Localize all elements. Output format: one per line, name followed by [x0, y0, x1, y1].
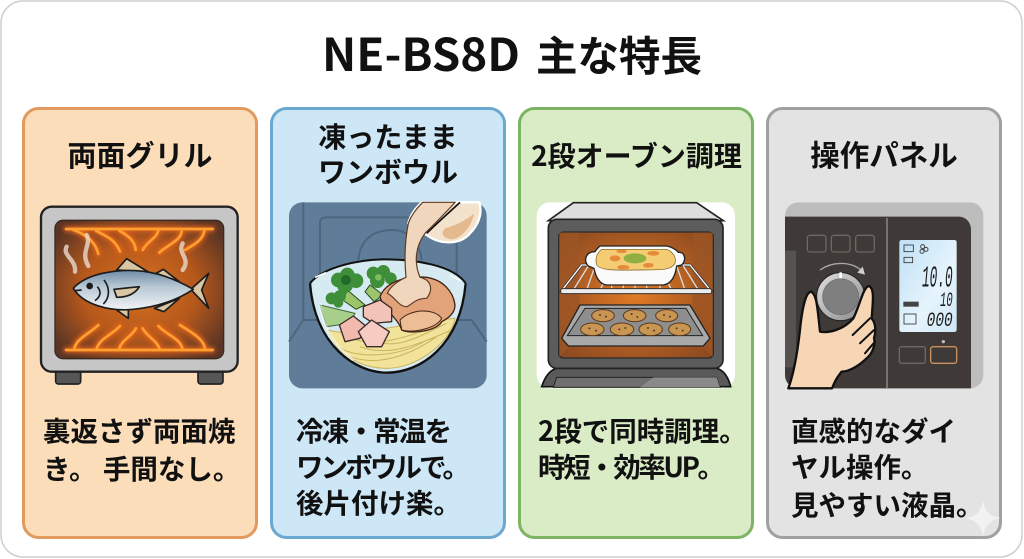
panel: 2段オーブン調理	[520, 108, 752, 538]
text: 冷凍・常温をワンボウルで: 冷凍・常温を	[296, 409, 452, 449]
text: 冷凍・常温をワンボウルで: ワンボウルで。	[296, 445, 470, 485]
panel: 操作パネル	[768, 108, 1000, 538]
text: 直感的なダイヤル操作: 見やすい液晶。	[791, 483, 984, 523]
title: 主な特長	[536, 23, 702, 83]
dial	[817, 273, 865, 321]
text: 冷凍・常温をワンボウルで	[296, 409, 470, 521]
chicken	[380, 277, 455, 332]
ham cubes	[339, 300, 392, 347]
heading: 操作パネル: 操作パネル	[810, 133, 958, 175]
icon: grill oven with fish	[41, 207, 238, 384]
lcd display: 000	[927, 310, 953, 333]
lower tray	[562, 305, 710, 346]
icon: control panel with dial	[785, 202, 983, 388]
panel: 両面グリル	[24, 108, 256, 538]
text: 冷凍・常温をワンボウルで: 後片付け楽。	[296, 481, 461, 521]
heading: 両面グリル: 両面グリル	[67, 133, 213, 175]
broccoli	[320, 265, 397, 327]
text: 2段で同時調理: 時短・効率UP。	[538, 445, 725, 485]
pitcher	[408, 202, 481, 242]
icon: glass bowl with pouring sauce	[289, 202, 487, 388]
fish	[73, 259, 209, 318]
lcd display	[899, 240, 957, 333]
text: 直感的なダイヤル操作: 直感的なダイ	[791, 409, 956, 449]
heading: 凍ったままワンボウル: 凍ったまま	[318, 116, 458, 156]
title: NE-BS8D	[322, 19, 520, 84]
heading: 凍ったままワンボウル: ワンボウル	[318, 151, 458, 191]
sauce stream	[387, 202, 455, 307]
text: 直感的なダイヤル操作	[791, 409, 984, 523]
lcd display: 10	[940, 290, 953, 313]
text: 裏返さず両面焼き	[43, 409, 240, 487]
icon: control panel with dial: 10.0	[922, 262, 953, 297]
upper rack	[562, 265, 711, 291]
text: 裏返さず両面焼き: 裏返さず両面焼	[43, 409, 236, 449]
hand	[788, 286, 875, 388]
icon: two-level oven	[537, 202, 735, 388]
bowl outline	[310, 283, 466, 373]
title	[322, 19, 702, 84]
gratin dish	[586, 246, 685, 285]
text: 2段で同時調理: 2段で同時調理。	[538, 409, 747, 449]
text: 2段で同時調理	[538, 409, 747, 485]
panel: 凍ったままワンボウル	[272, 108, 504, 538]
icon: sparkle	[965, 500, 1001, 537]
noodles	[328, 318, 455, 368]
heading: 凍ったままワンボウル	[318, 116, 458, 191]
bowl body	[310, 259, 466, 373]
text: 裏返さず両面焼き: き。 手間なし。	[43, 447, 240, 487]
text: 直感的なダイヤル操作: ヤル操作。	[791, 445, 928, 485]
heading: 2段オーブン調理: 2段オーブン調理	[531, 135, 742, 175]
